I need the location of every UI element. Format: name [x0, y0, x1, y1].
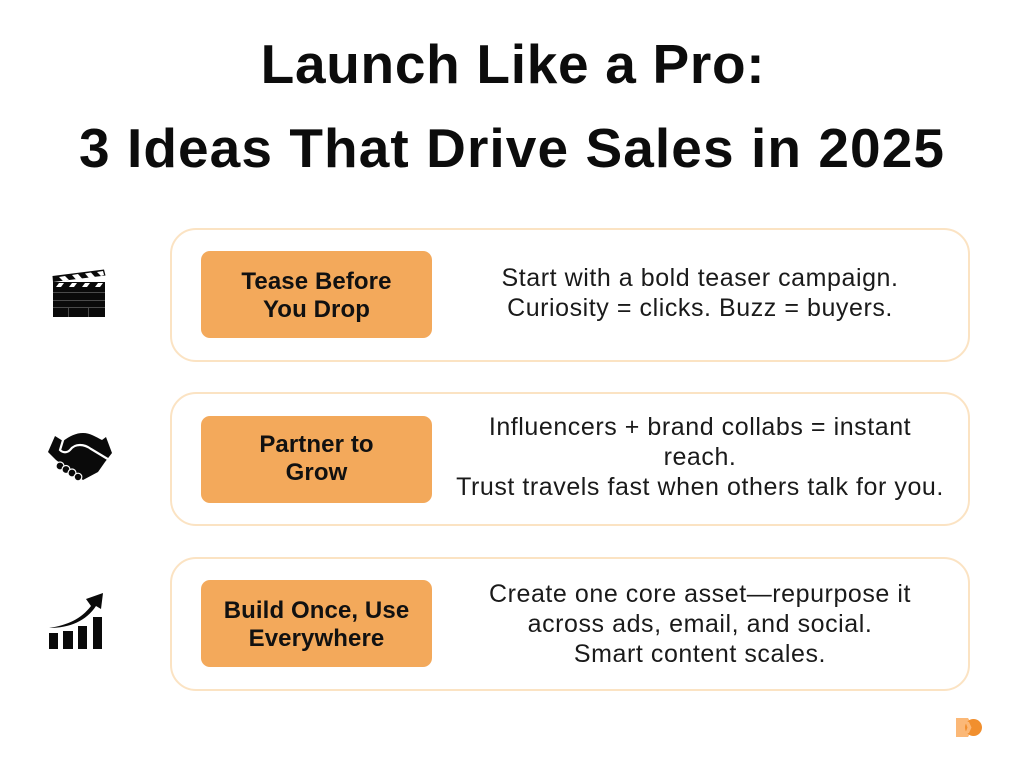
title: 3 Ideas That Drive Sales in 2025 [79, 117, 945, 179]
description 2: reach. [664, 443, 736, 471]
description 2: Influencers + brand collabs = instant [489, 413, 911, 441]
label button 1: Tease Before [241, 268, 392, 295]
description 1 [501, 264, 899, 322]
label button 3: Build Once, Use [224, 597, 409, 624]
label button 1 [201, 251, 432, 338]
label button 2: Partner to [259, 431, 374, 458]
icon: handshake [48, 433, 112, 480]
label button 3 [201, 580, 432, 667]
description 3: Create one core asset—repurpose it [489, 580, 911, 608]
description 2: Trust travels fast when others talk for you. [456, 473, 944, 501]
icon: logo [956, 718, 982, 737]
description 3: across ads, email, and social. [528, 610, 872, 638]
title [79, 33, 945, 179]
label button 1: You Drop [263, 296, 370, 323]
title: Launch Like a Pro: [261, 33, 765, 95]
description 1: Start with a bold teaser campaign. [501, 264, 899, 292]
card 3 [170, 557, 970, 691]
description 2 [456, 413, 944, 501]
card 1 [170, 228, 970, 362]
label button 2: Grow [286, 459, 347, 486]
card 2 [170, 392, 970, 526]
label button 2 [201, 416, 432, 503]
description 1: Curiosity = clicks. Buzz = buyers. [507, 294, 893, 322]
description 3: Smart content scales. [574, 640, 826, 668]
icon: clapperboard [52, 270, 106, 317]
label button 3: Everywhere [249, 625, 384, 652]
description 3 [489, 580, 911, 668]
icon: growth chart [49, 593, 103, 649]
